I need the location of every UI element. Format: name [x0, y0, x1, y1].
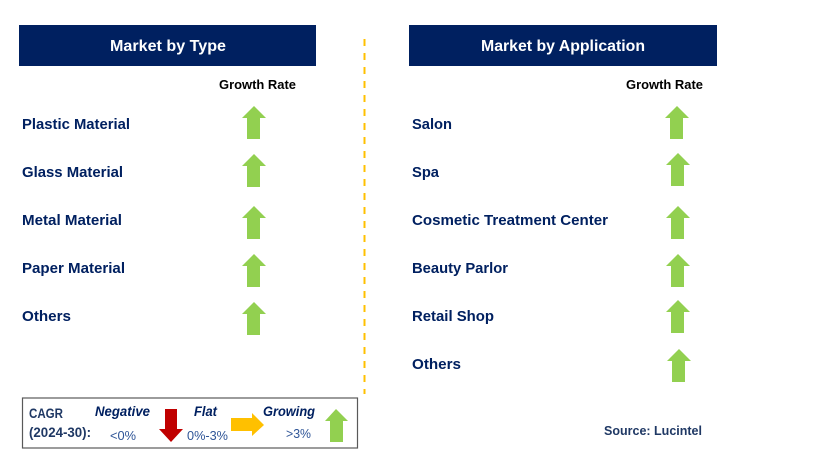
heading: market by type [19, 25, 316, 66]
icon: green up arrow [667, 349, 691, 382]
heading: market by application: Market by Application [481, 38, 645, 55]
legend value: above 3: >3% [286, 426, 311, 441]
column label: growth rate: Growth Rate [626, 77, 703, 92]
icon: green up arrow [666, 300, 690, 333]
label: others: Others [22, 308, 71, 325]
icon: green up arrow [242, 206, 266, 239]
legend value: below 0: <0% [110, 428, 136, 443]
icon: green up arrow [242, 154, 266, 187]
label: plastic material: Plastic Material [22, 116, 130, 133]
source: Source: Lucintel [604, 423, 702, 438]
label: cosmetic treatment center: Cosmetic Treatment Center [412, 212, 608, 229]
icon: green up arrow [666, 206, 690, 239]
legend title: CAGR [29, 406, 63, 421]
label: paper material: Paper Material [22, 260, 125, 277]
legend period: (2024-30): [29, 425, 91, 440]
icon: red down arrow [159, 409, 183, 442]
legend value: 0 to 3: 0%-3% [187, 428, 228, 443]
legend: CAGR [22, 398, 358, 448]
label: metal material: Metal Material [22, 212, 122, 229]
legend: growing: Growing [263, 404, 316, 419]
icon: green up arrow [666, 153, 690, 186]
icon: green up arrow [242, 302, 266, 335]
heading: market by application [409, 25, 717, 66]
label: others: Others [412, 356, 461, 373]
label: spa: Spa [412, 164, 440, 181]
icon: green up arrow [665, 106, 689, 139]
panel: market by type [19, 25, 316, 335]
heading: market by type: Market by Type [110, 38, 226, 55]
panel: market by application [409, 25, 717, 382]
legend: flat: Flat [194, 404, 217, 419]
label: retail shop: Retail Shop [412, 308, 494, 325]
icon: green up arrow [242, 106, 266, 139]
icon: green up arrow [242, 254, 266, 287]
legend: negative: Negative [95, 404, 150, 419]
label: glass material: Glass Material [22, 164, 123, 181]
icon: green up arrow [666, 254, 690, 287]
label: salon: Salon [412, 116, 452, 133]
icon: amber right arrow [231, 413, 264, 436]
label: beauty parlor: Beauty Parlor [412, 260, 508, 277]
icon: green up arrow [325, 409, 348, 442]
column label: growth rate: Growth Rate [219, 77, 296, 92]
